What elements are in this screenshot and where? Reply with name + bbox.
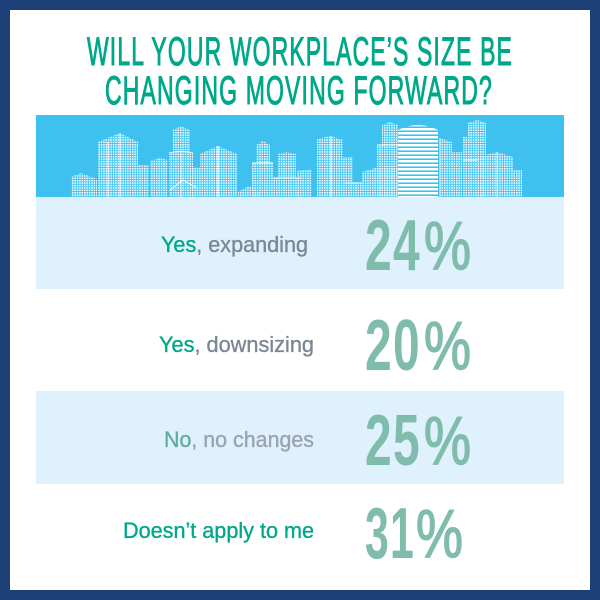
value: 20 bbox=[365, 306, 421, 386]
value: % bbox=[424, 403, 471, 479]
label: No, no changes bbox=[164, 427, 314, 452]
value: 25 bbox=[365, 401, 421, 481]
row: yes, expanding bbox=[36, 197, 564, 289]
value: % bbox=[416, 496, 463, 572]
row: yes, downsizing bbox=[159, 306, 471, 386]
row: doesn't apply to me bbox=[123, 494, 463, 574]
skyline banner bbox=[36, 115, 564, 197]
label: Yes, expanding bbox=[161, 232, 308, 257]
label: Yes, downsizing bbox=[159, 332, 314, 357]
cylinder tower bbox=[398, 125, 438, 197]
value: 24 bbox=[365, 206, 421, 286]
row: no, no changes bbox=[36, 391, 564, 484]
value: % bbox=[424, 308, 471, 384]
label: Doesn’t apply to me bbox=[123, 518, 314, 543]
icon: city skyline bbox=[71, 120, 522, 197]
value: % bbox=[424, 208, 471, 284]
value: 31 bbox=[365, 494, 415, 574]
title bbox=[87, 30, 513, 113]
